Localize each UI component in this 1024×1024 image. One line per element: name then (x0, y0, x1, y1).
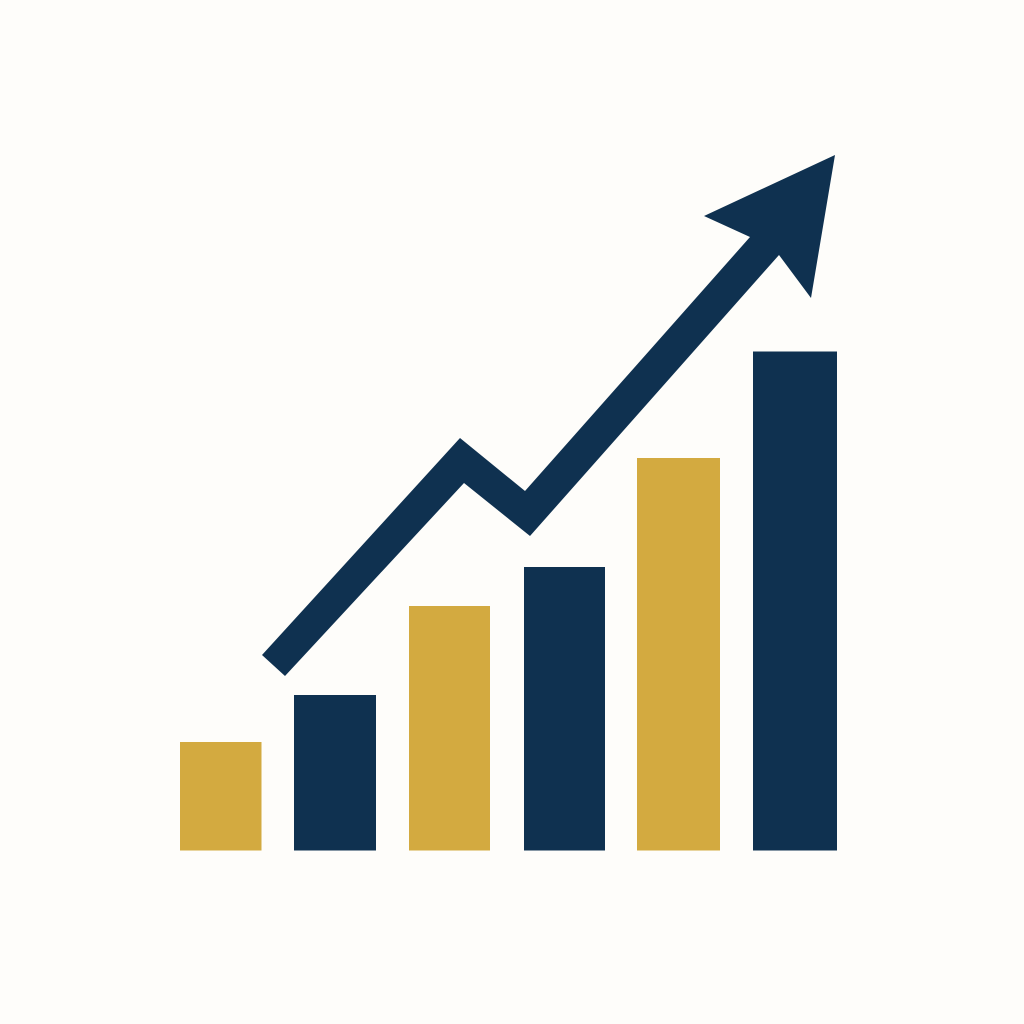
bar 1 (180, 742, 262, 850)
bar 5 (637, 458, 720, 850)
bar 4 (524, 567, 605, 850)
bar chart (180, 352, 837, 850)
bar 3 (409, 606, 490, 850)
bar 2 (294, 695, 376, 850)
bar 6 (753, 352, 837, 850)
icon: rising trend arrow (262, 155, 835, 676)
